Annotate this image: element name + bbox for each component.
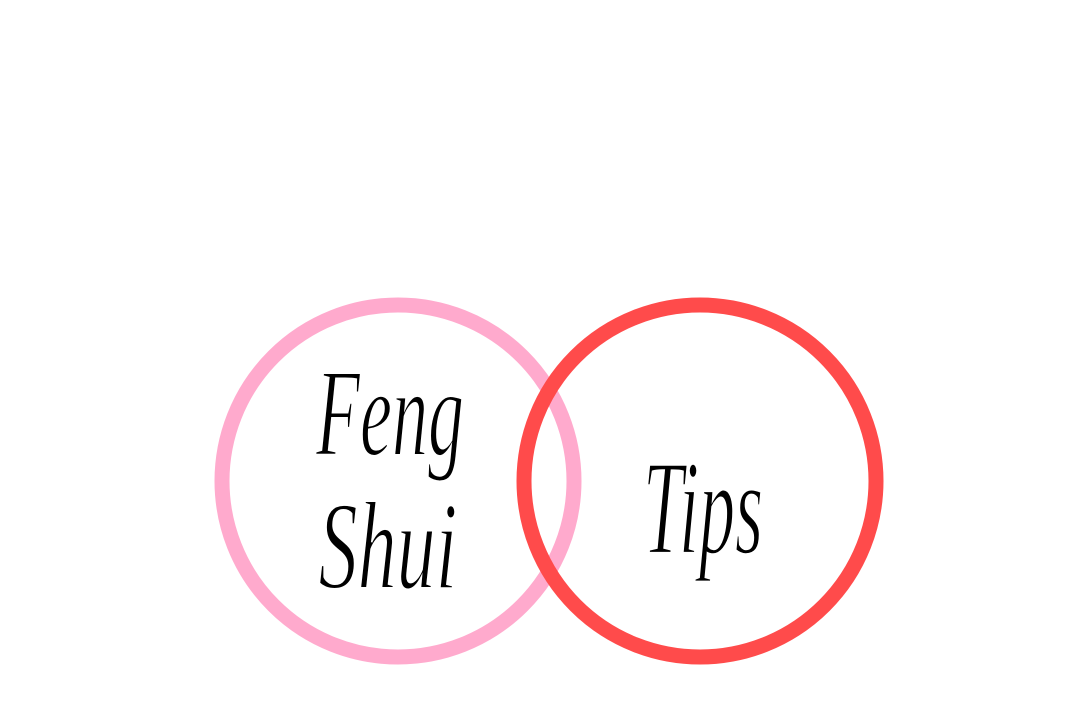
heading text: Feng: Feng xyxy=(315,345,464,483)
pink circle: Feng Shui xyxy=(222,305,574,657)
red circle: Tips xyxy=(524,305,876,657)
heading text: Shui: Shui xyxy=(319,476,457,616)
heading text: Tips: Tips xyxy=(643,434,763,583)
